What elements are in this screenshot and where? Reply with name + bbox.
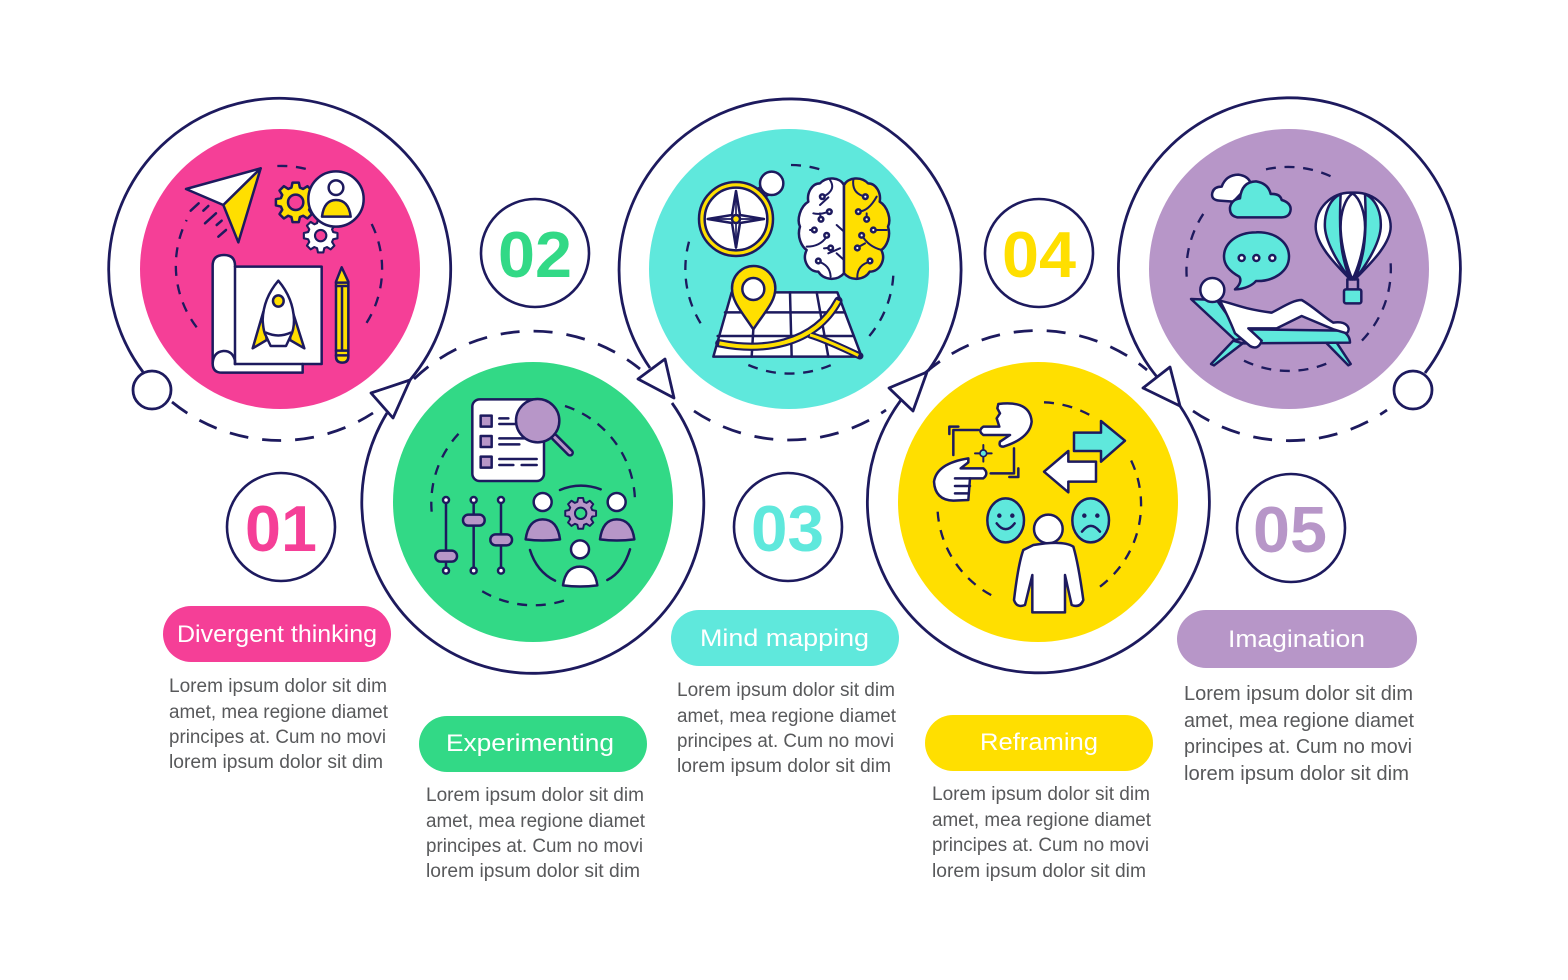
ring: step 5	[1118, 98, 1460, 441]
ring: step 2	[362, 331, 704, 673]
ring: step 3	[619, 99, 961, 440]
text block: step 5 description	[1184, 683, 1414, 785]
number badge 03: 03	[751, 492, 824, 565]
arrow: step 2 to 3	[638, 359, 674, 398]
text block: step 4 description: amet, mea regione diamet	[932, 810, 1152, 831]
number badge 02: 02	[498, 218, 572, 291]
panel: 03 mind mapping	[619, 99, 961, 777]
text block: step 5 description: Lorem ipsum dolor sit dim	[1184, 683, 1413, 705]
arrow: step 3 to 4	[889, 372, 927, 411]
arrow: step 4 to 5	[1143, 367, 1180, 406]
pill: experimenting: Experimenting	[446, 730, 614, 757]
text block: step 1 description: amet, mea regione diamet	[169, 702, 389, 723]
number badge 03	[734, 473, 842, 581]
panel: 05 imagination	[1118, 98, 1460, 785]
icon: paper plane, gears, blueprint, pencil	[176, 166, 382, 373]
number badge 01	[227, 473, 335, 581]
text block: step 3 description	[677, 680, 897, 777]
text block: step 4 description: principes at. Cum no movi	[932, 835, 1149, 856]
text block: step 5 description: principes at. Cum no movi	[1184, 736, 1412, 758]
pill: divergent thinking	[163, 606, 391, 662]
text block: step 2 description: amet, mea regione diamet	[426, 811, 646, 832]
panel: 04 reframing	[867, 199, 1209, 882]
arrow: step 1 to 2	[371, 380, 410, 418]
panel: 02 experimenting	[362, 199, 704, 882]
number badge 04	[985, 199, 1093, 307]
text block: step 4 description: Lorem ipsum dolor sit dim	[932, 784, 1150, 805]
pill: imagination	[1177, 610, 1417, 668]
text block: step 2 description	[426, 785, 646, 882]
text block: step 3 description: lorem ipsum dolor sit dim	[677, 756, 891, 777]
text block: step 2 description: lorem ipsum dolor sit dim	[426, 861, 640, 882]
ring: step 4	[867, 331, 1209, 673]
text block: step 1 description: lorem ipsum dolor sit dim	[169, 752, 383, 773]
coloured disc: step 2	[393, 362, 673, 642]
number badge 01: 01	[245, 492, 317, 565]
text block: step 2 description: Lorem ipsum dolor sit dim	[426, 785, 644, 806]
number badge 04: 04	[1002, 218, 1076, 291]
coloured disc: step 3	[649, 129, 929, 409]
text block: step 5 description: amet, mea regione diamet	[1184, 710, 1414, 732]
icon: compass, brain, map pin	[685, 165, 893, 374]
pill: reframing: Reframing	[980, 729, 1098, 756]
pill: imagination: Imagination	[1228, 626, 1365, 653]
pill: mind mapping	[671, 610, 899, 666]
text block: step 3 description: amet, mea regione diamet	[677, 706, 897, 727]
number badge 05: 05	[1253, 493, 1327, 566]
text block: step 1 description: Lorem ipsum dolor sit dim	[169, 676, 387, 697]
pill: experimenting	[419, 716, 647, 772]
pill: divergent thinking: Divergent thinking	[177, 621, 377, 648]
text block: step 3 description: principes at. Cum no movi	[677, 731, 894, 752]
coloured disc: step 5	[1149, 129, 1429, 409]
text block: step 5 description: lorem ipsum dolor sit dim	[1184, 763, 1409, 785]
text block: step 4 description: lorem ipsum dolor sit dim	[932, 861, 1146, 882]
text block: step 3 description: Lorem ipsum dolor sit dim	[677, 680, 895, 701]
icon: hands framing, arrows, masks, person	[934, 402, 1141, 612]
text block: step 4 description	[932, 784, 1152, 882]
text block: step 1 description: principes at. Cum no movi	[169, 727, 386, 748]
text block: step 2 description: principes at. Cum no movi	[426, 836, 643, 857]
text block: step 1 description	[169, 676, 389, 773]
icon: checklist, sliders, team	[431, 399, 635, 605]
icon: clouds, speech bubble, balloon, lounger	[1186, 167, 1391, 371]
number badge 02	[481, 199, 589, 307]
pill: mind mapping: Mind mapping	[700, 625, 869, 652]
coloured disc: step 1	[140, 129, 420, 409]
coloured disc: step 4	[898, 362, 1178, 642]
panel: 01 divergent thinking	[109, 98, 451, 773]
ring: step 1	[109, 98, 451, 440]
pill: reframing	[925, 715, 1153, 771]
number badge 05	[1237, 474, 1345, 582]
